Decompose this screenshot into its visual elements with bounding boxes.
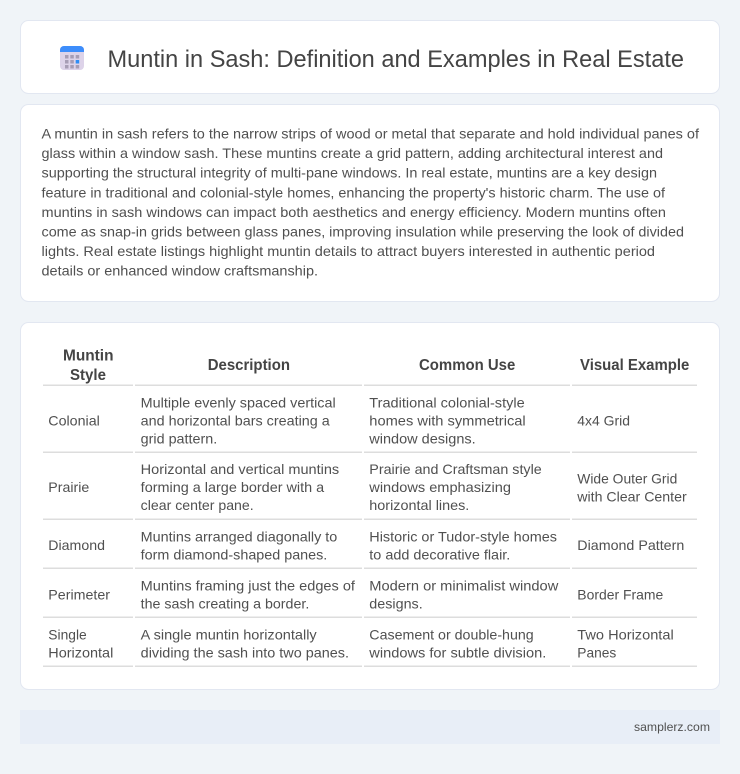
- footer source text: samplerz.com: [634, 720, 710, 734]
- table row: Colonial: Traditional colonial-style: [369, 394, 525, 410]
- text block: definition: supporting the structural integrity of multi-pane windows. In real estate, muntins are a key design: [42, 165, 657, 181]
- text block: definition: A muntin in sash refers to the narrow strips of wood or metal that separate and hold individual panes of: [42, 126, 699, 142]
- table row: Diamond: Historic or Tudor-style homes: [369, 528, 557, 544]
- table row: Single Horizontal: Casement or double-hung: [369, 626, 534, 642]
- table header row: Muntin: [63, 348, 114, 364]
- table row: Diamond: Diamond: [48, 537, 105, 553]
- table row: Perimeter: Perimeter: [48, 586, 110, 602]
- table row: Single Horizontal: Horizontal: [48, 644, 113, 660]
- table row: Perimeter: Modern or minimalist window: [369, 577, 559, 593]
- table row: Colonial: window designs.: [368, 430, 476, 446]
- table row: Diamond: Muntins arranged diagonally to: [141, 528, 338, 544]
- table row: Prairie: [48, 461, 687, 513]
- table row: Perimeter: Muntins framing just the edges of: [141, 577, 355, 593]
- table row: Colonial: 4x4 Grid: [577, 412, 630, 428]
- table row: Perimeter: [48, 577, 664, 611]
- text block: definition: lights. Real estate listings highlight muntin details to attract buyers interested in authentic period: [42, 243, 655, 259]
- table row: Diamond: form diamond-shaped panes.: [141, 546, 327, 562]
- table row: Diamond: to add decorative flair.: [369, 546, 510, 562]
- table row: Prairie: clear center pane.: [141, 497, 254, 513]
- table row: Perimeter: designs.: [369, 595, 423, 611]
- icon: calendar window: [60, 46, 84, 70]
- table row: Diamond: Diamond Pattern: [577, 537, 684, 553]
- table row: Prairie: Horizontal and vertical muntins: [141, 461, 339, 477]
- table row: Colonial: Multiple evenly spaced vertical: [141, 394, 336, 410]
- panel: summary paragraph: [20, 104, 720, 302]
- table row: Perimeter: the sash creating a border.: [141, 595, 309, 611]
- table row: Prairie: forming a large border with a: [141, 479, 324, 495]
- table row: Colonial: [48, 394, 630, 446]
- table row: Prairie: Wide Outer Grid: [577, 470, 677, 486]
- panel: title header: [20, 20, 720, 94]
- table row: Prairie: windows emphasizing: [368, 479, 511, 495]
- table row: Single Horizontal: dividing the sash into two panes.: [141, 644, 349, 660]
- table header row: Description: [208, 357, 290, 374]
- table row: Prairie: Prairie and Craftsman style: [369, 461, 542, 477]
- table header row: Common Use: [419, 357, 515, 374]
- table row: Prairie: with Clear Center: [576, 488, 687, 504]
- table row: Single Horizontal: Two Horizontal: [577, 626, 674, 642]
- text block: definition: muntins in sash windows can impact both aesthetics and energy efficiency. Modern muntins often: [42, 204, 666, 220]
- table row: Colonial: Colonial: [48, 412, 100, 428]
- table row: Colonial: homes with symmetrical: [369, 412, 526, 428]
- table row: Colonial: and horizontal bars creating a: [141, 412, 330, 428]
- table row: Prairie: Prairie: [48, 479, 90, 495]
- text block: definition: [42, 126, 699, 279]
- footer bar: [20, 710, 720, 744]
- text block: definition: feature in traditional and colonial-style homes, enhancing the property's historic charm. The use of: [42, 184, 665, 200]
- title: Muntin in Sash: Definition and Examples in Real Estate: [108, 46, 684, 73]
- table row: Single Horizontal: [48, 626, 674, 660]
- table row: Diamond: [48, 528, 684, 562]
- table header row: Style: [70, 367, 106, 384]
- table row: Prairie: horizontal lines.: [369, 497, 469, 513]
- table header row: Visual Example: [580, 357, 689, 374]
- table row: Single Horizontal: Panes: [577, 644, 616, 660]
- table row: Single Horizontal: windows for subtle division.: [368, 644, 546, 660]
- text block: definition: glass within a window sash. These muntins create a grid pattern, adding architectural interest and: [42, 145, 663, 161]
- table row: Colonial: grid pattern.: [141, 430, 217, 446]
- text block: definition: details or enhanced window craftsmanship.: [42, 263, 318, 279]
- table row: Single Horizontal: A single muntin horizontally: [141, 626, 317, 642]
- table row: Single Horizontal: Single: [48, 626, 87, 642]
- panel: muntin styles table: [20, 322, 720, 690]
- table header row: [63, 348, 689, 384]
- text block: definition: come as snap-in grids between glass panes, improving insulation while preserving the look of divided: [42, 224, 684, 240]
- table row: Perimeter: Border Frame: [577, 586, 664, 602]
